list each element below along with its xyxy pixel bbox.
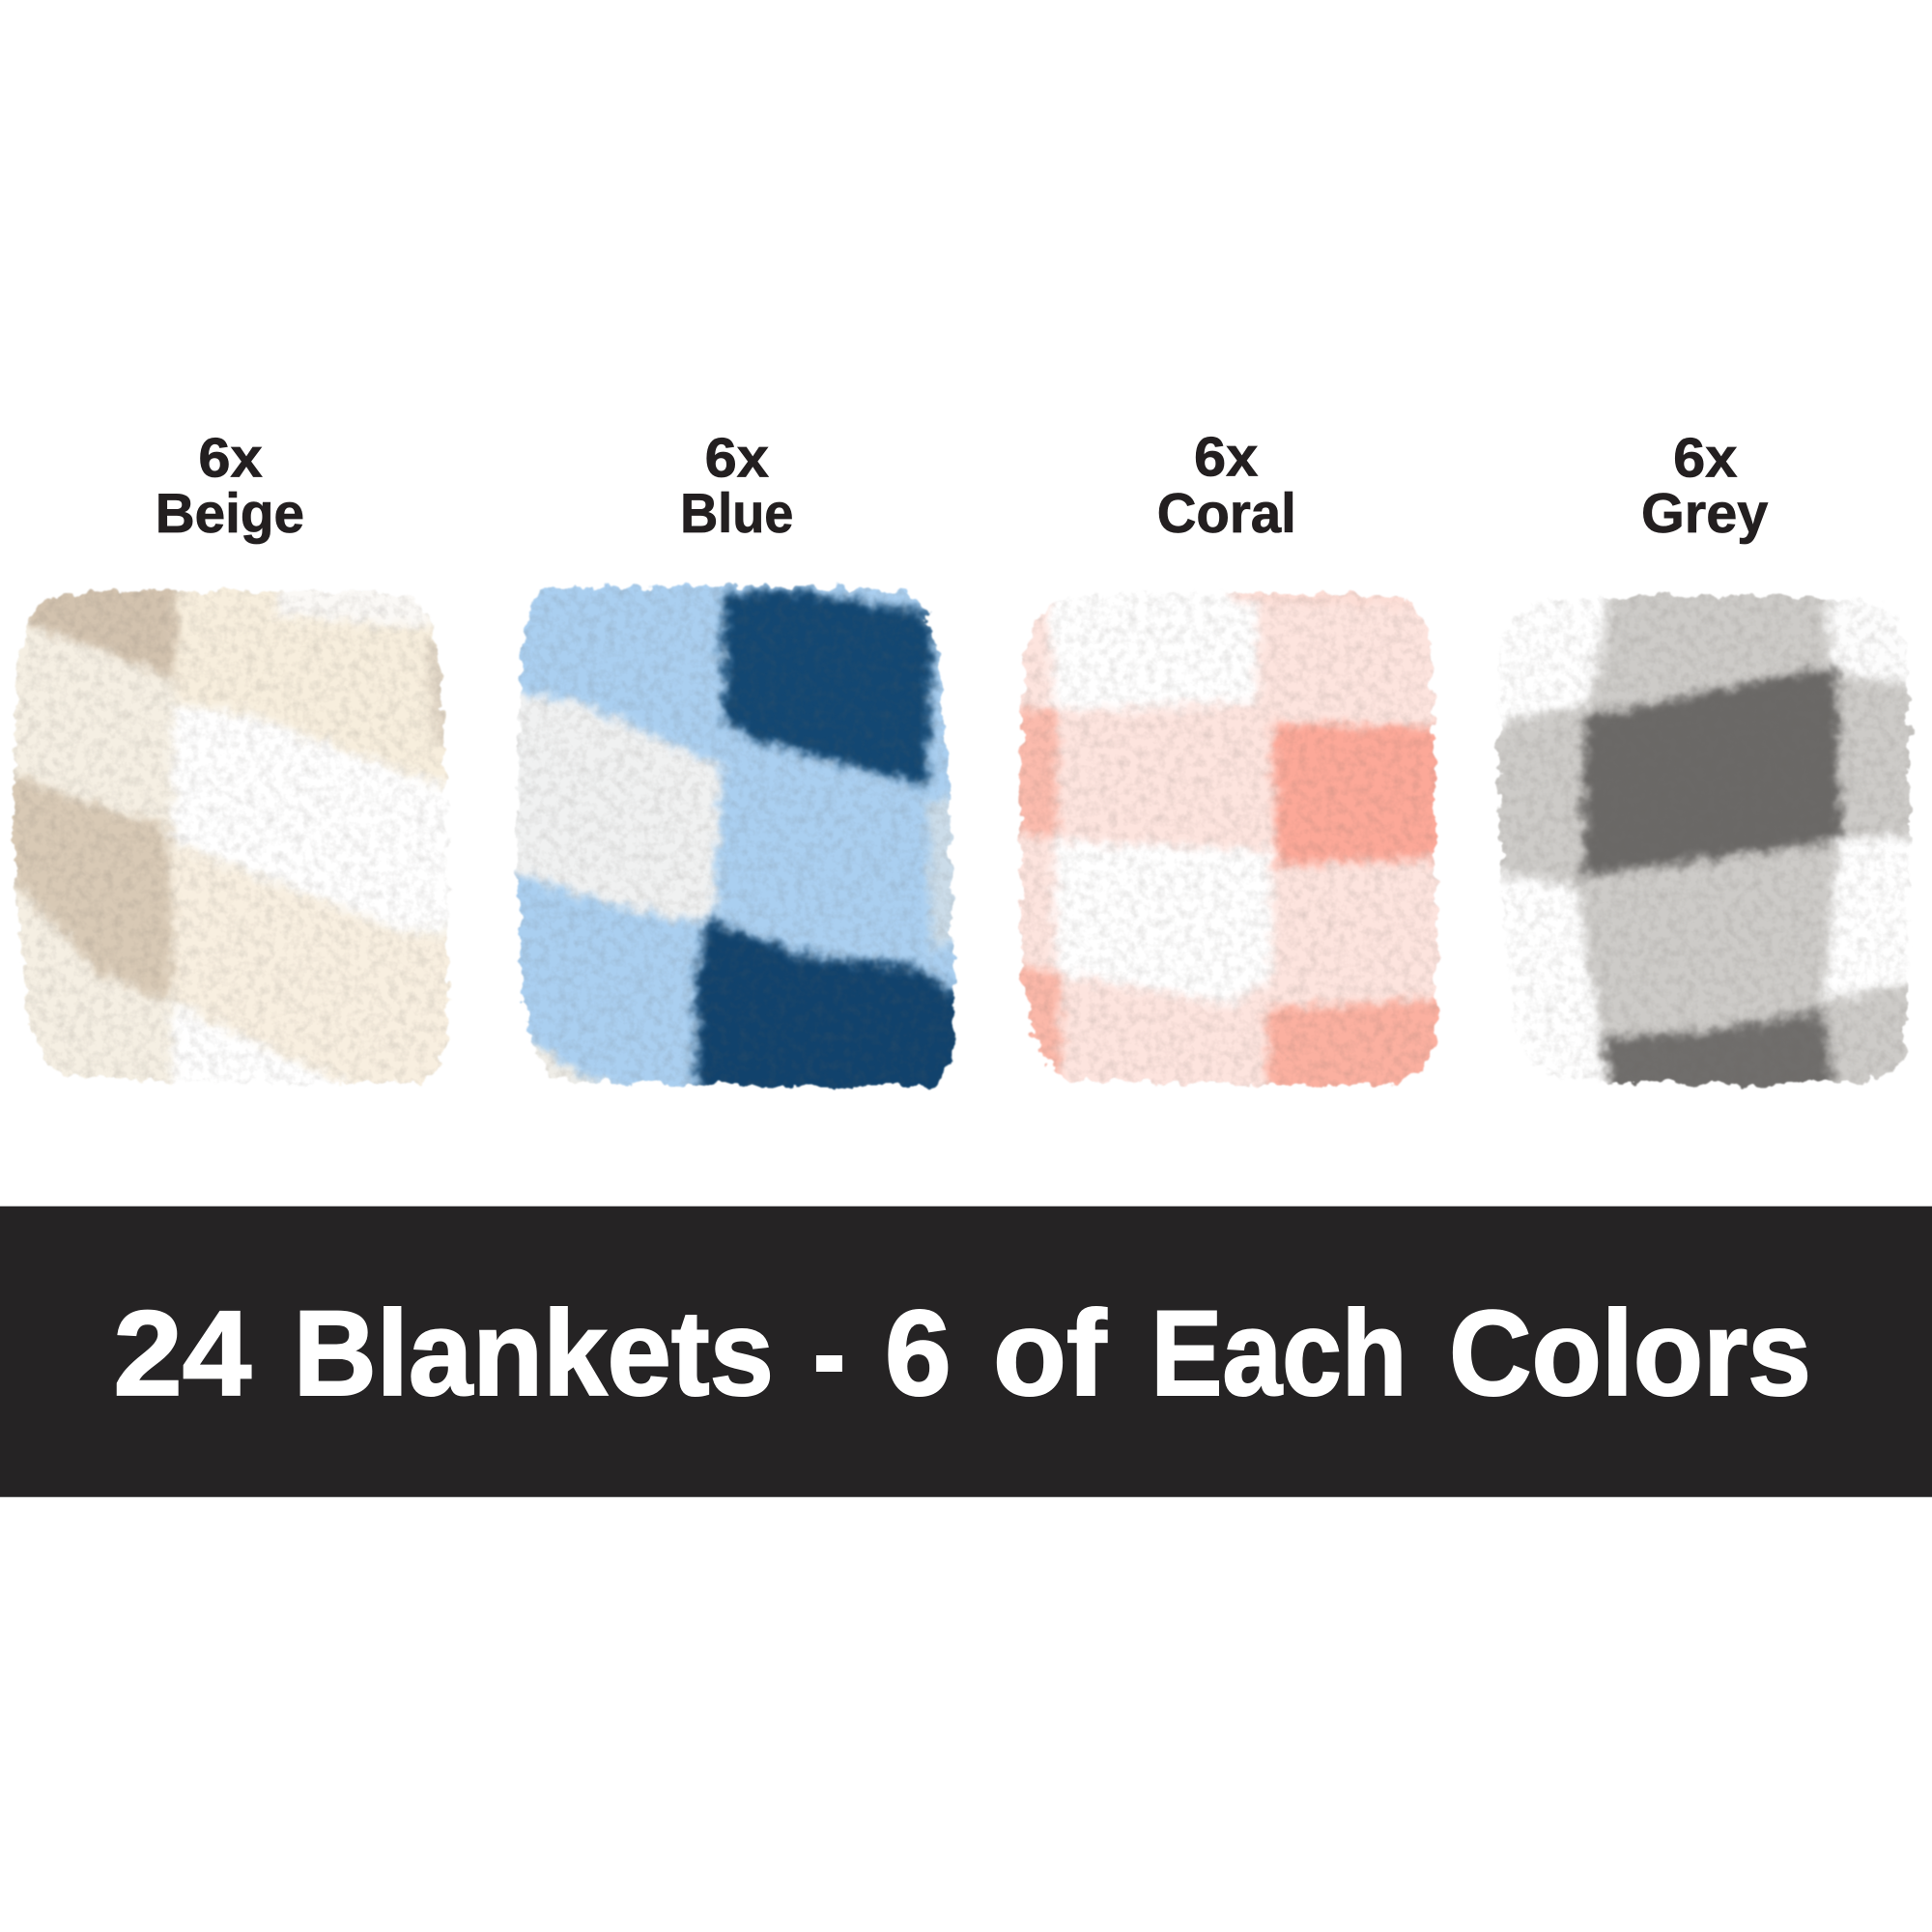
- banner text: of: [993, 1287, 1107, 1421]
- banner text: [113, 1287, 1811, 1421]
- label: 6x Blue: 6x: [705, 428, 769, 490]
- banner text: 24: [113, 1287, 251, 1421]
- label: 6x Coral: Coral: [1157, 483, 1296, 545]
- label: 6x Beige: [156, 428, 304, 545]
- blanket: grey: [1493, 591, 1916, 1090]
- label: 6x Beige: Beige: [156, 483, 304, 545]
- label: 6x Beige: 6x: [198, 428, 263, 490]
- label: 6x Grey: [1641, 428, 1768, 545]
- label: 6x Coral: [1157, 426, 1296, 545]
- blanket: coral: [1016, 589, 1441, 1089]
- blanket: blue: [514, 582, 958, 1092]
- label: 6x Grey: 6x: [1673, 428, 1738, 490]
- label: 6x Blue: Blue: [680, 483, 793, 545]
- banner text: Blankets: [294, 1287, 774, 1421]
- banner: [0, 1207, 1932, 1497]
- label: 6x Grey: Grey: [1641, 483, 1768, 545]
- banner text: Each: [1151, 1287, 1407, 1421]
- banner text: -: [813, 1287, 845, 1421]
- banner text: 6: [885, 1287, 952, 1421]
- label: 6x Coral: 6x: [1194, 426, 1258, 488]
- label: 6x Blue: [680, 428, 793, 545]
- banner text: Colors: [1449, 1287, 1811, 1421]
- blanket: beige: [10, 586, 452, 1086]
